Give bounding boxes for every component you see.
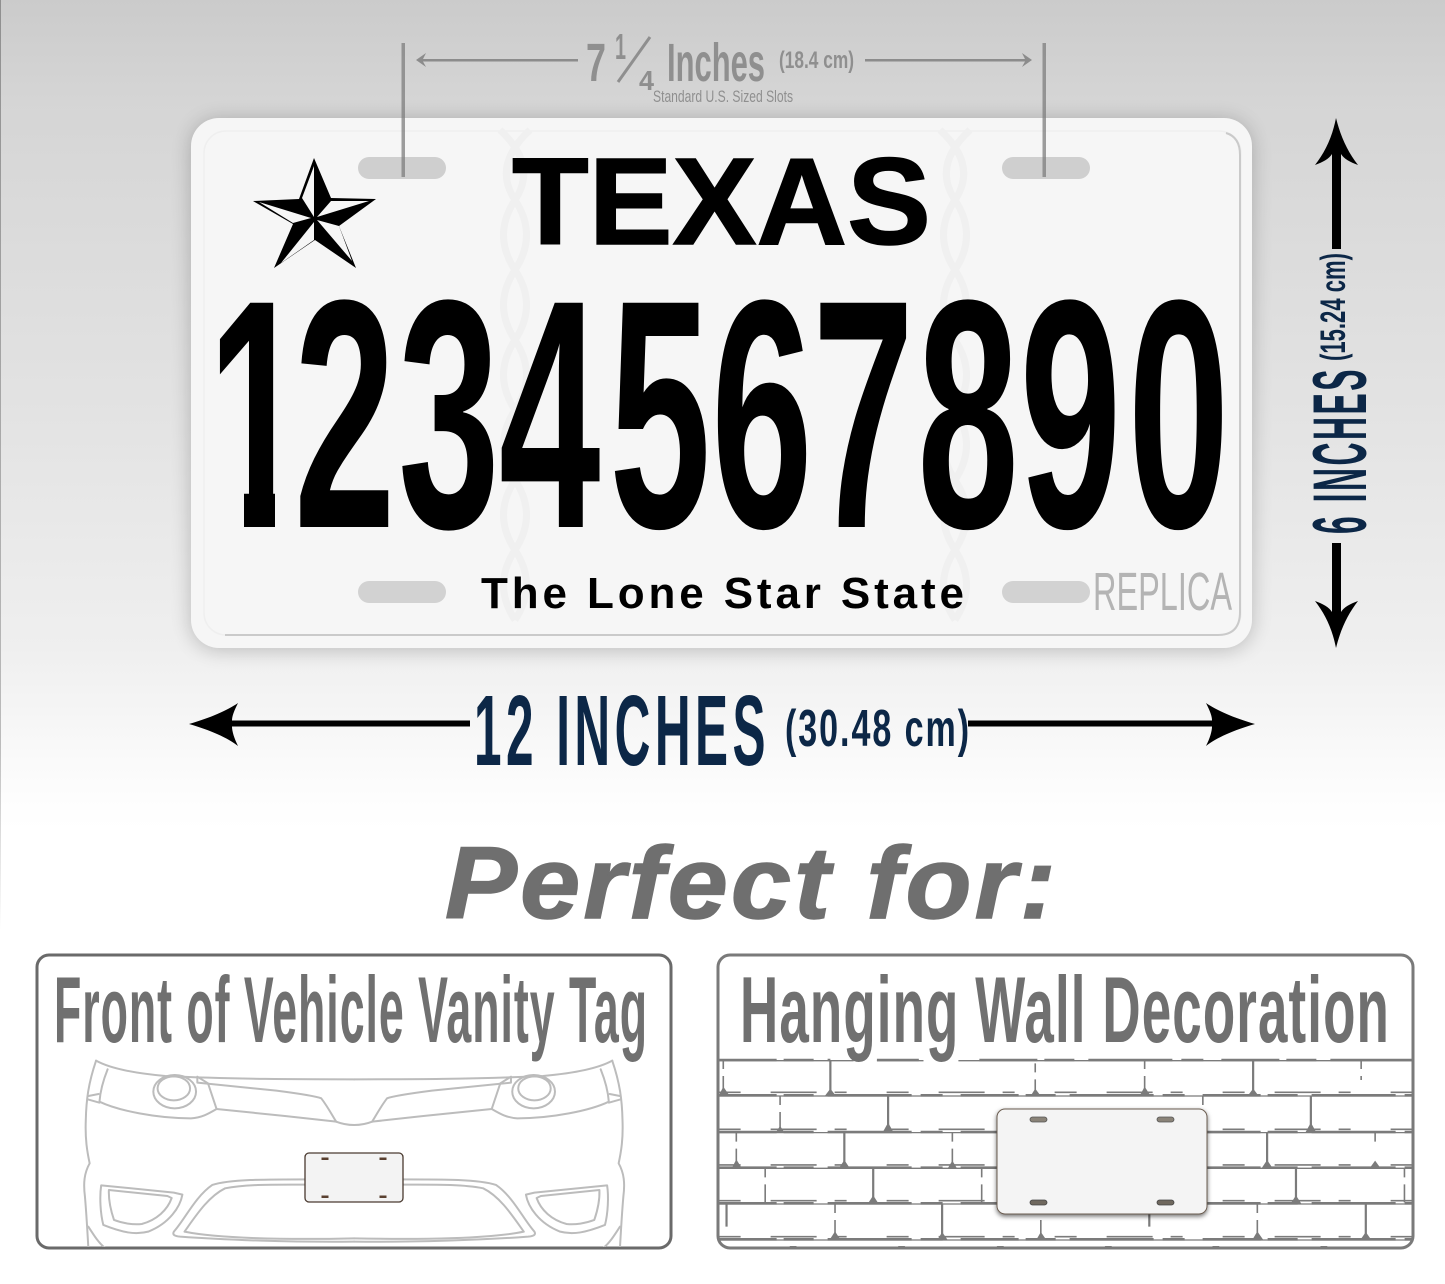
arrow: height top — [1315, 118, 1358, 249]
width metric: (30.48 cm) — [785, 700, 971, 758]
replica mark: REPLICA — [1093, 562, 1232, 622]
height metric: (15.24 cm) — [1314, 253, 1353, 361]
mortar lines — [719, 1061, 1412, 1240]
fraction bar — [618, 37, 650, 82]
plate slogan: The Lone Star State — [481, 569, 964, 618]
panel: vehicle vanity tag — [37, 955, 671, 1248]
light vertical joints — [723, 1060, 1404, 1240]
brick wall — [719, 1060, 1412, 1249]
plate number: 234567890 — [294, 232, 1229, 596]
strong vertical joints — [727, 1060, 1366, 1240]
mounting slot: top left — [358, 157, 446, 179]
heading: perfect for: Perfect for: — [445, 826, 1059, 940]
slot guide line: right — [1042, 43, 1046, 177]
height dimension: 6 INCHES — [1298, 367, 1383, 534]
slot spacing unit: Inches — [667, 33, 765, 93]
car line drawing — [84, 1061, 624, 1248]
slot guide line: left — [402, 43, 405, 177]
panel: hanging wall decoration — [718, 955, 1413, 1249]
arrow: slot spacing right — [865, 53, 1032, 67]
arrow: width left — [189, 703, 470, 746]
arrow: slot spacing left — [416, 53, 578, 67]
slot spacing dimension — [402, 26, 1046, 177]
mounting slot: bottom right — [1002, 581, 1090, 603]
width dimension — [189, 675, 1255, 787]
text: Front of Vehicle Vanity Tag — [54, 957, 648, 1062]
arrow: height bottom — [1315, 543, 1358, 648]
slot spacing note: Standard U.S. Sized Slots — [653, 87, 793, 106]
icon: small plate on car — [305, 1153, 403, 1202]
joint wedges — [719, 1087, 1381, 1249]
width dimension: 12 INCHES — [474, 675, 770, 787]
plate number: 1 — [208, 232, 306, 597]
slot spacing measure: 7 — [586, 33, 606, 93]
plate watermark: left ribbon — [500, 130, 530, 620]
icon: nautical star — [253, 158, 376, 268]
plate state name: TEXAS — [512, 134, 931, 271]
mounting slot: bottom left — [358, 581, 446, 603]
plate watermark: right ribbon — [940, 130, 970, 620]
mounting slot: top right — [1002, 157, 1090, 179]
icon: plate on wall — [997, 1109, 1207, 1214]
arrow: width right — [968, 703, 1255, 746]
fraction denominator: 4 — [639, 65, 654, 96]
license plate — [191, 118, 1252, 650]
slot spacing metric: (18.4 cm) — [779, 47, 854, 74]
fraction numerator: 1 — [615, 26, 626, 67]
